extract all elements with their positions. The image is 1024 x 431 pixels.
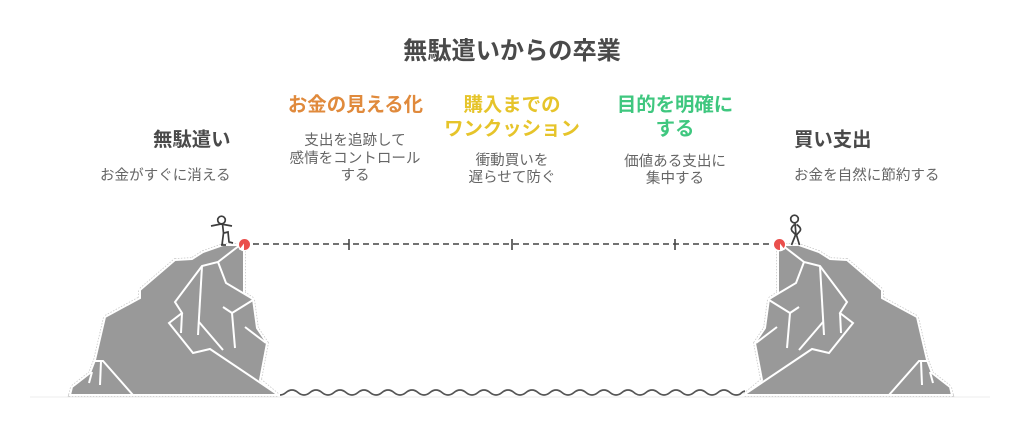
step 3 heading: 目的を明確に — [617, 94, 733, 116]
end heading: 買い支出 — [794, 129, 872, 151]
end description: お金を自然に節約する — [794, 168, 939, 184]
step 3 heading: する — [656, 118, 694, 140]
step 3 description: 価値ある支出に — [624, 154, 726, 170]
ground line — [30, 396, 990, 398]
start marker — [238, 238, 251, 251]
step 3 description: 集中する — [646, 171, 704, 187]
water waves — [280, 390, 745, 395]
step 1 heading: お金の見える化 — [288, 94, 423, 116]
step 2 heading: 購入までの — [464, 94, 560, 116]
dashed path with milestones — [253, 239, 772, 250]
step 2 description: 遅らせて防ぐ — [468, 170, 556, 186]
title: 無駄遣いからの卒業 — [403, 38, 621, 65]
step 2 heading: ワンクッション — [444, 118, 580, 140]
step 1 description — [290, 132, 420, 184]
start description: お金がすぐに消える — [100, 168, 230, 184]
step 2 heading — [444, 94, 580, 140]
step 1 description: 感情をコントロール — [290, 151, 420, 167]
start heading: 無駄遣い — [153, 129, 231, 151]
left cliff — [70, 245, 278, 395]
step 1 description: する — [340, 168, 370, 184]
icon: balancing stick figure — [211, 216, 233, 245]
step 2 description — [468, 152, 556, 186]
icon: standing stick figure — [791, 215, 801, 245]
step 2 description: 衝動買いを — [476, 152, 548, 168]
end marker — [773, 238, 786, 251]
step 3 heading — [617, 94, 733, 140]
step 1 description: 支出を追跡して — [304, 133, 406, 149]
right cliff — [744, 245, 952, 395]
step 3 description — [624, 153, 726, 187]
